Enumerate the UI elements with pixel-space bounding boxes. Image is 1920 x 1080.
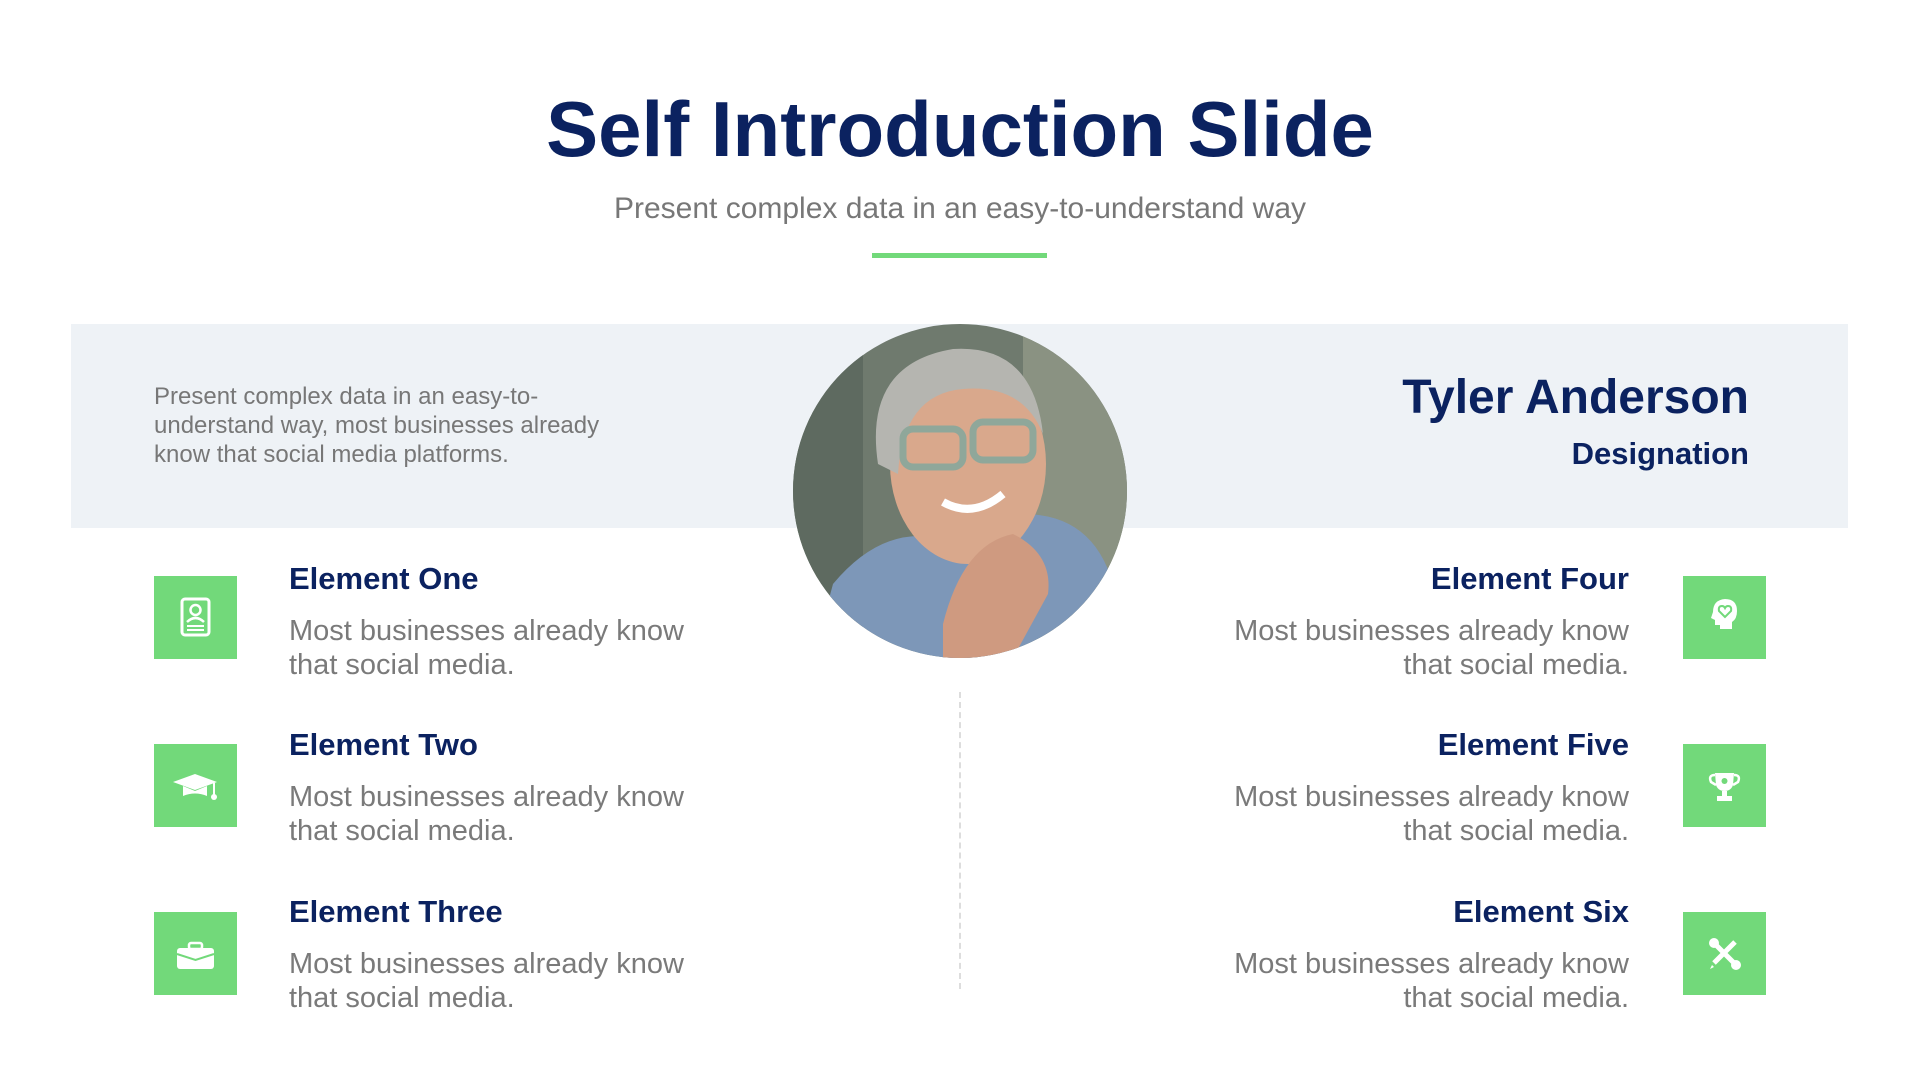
icon: head with heart [1683, 576, 1766, 659]
element two: Element Two [289, 727, 478, 762]
icon: trophy [1683, 744, 1766, 827]
element two: Most businesses already know [289, 781, 684, 813]
icon: graduation cap [154, 744, 237, 827]
element three [154, 894, 684, 1014]
element five [1234, 727, 1766, 847]
element five: Element Five [1438, 727, 1629, 762]
element four [1234, 561, 1766, 681]
name block: Designation [1572, 436, 1749, 471]
header band [71, 324, 1848, 528]
element five: Most businesses already know [1234, 781, 1629, 813]
icon: briefcase [154, 912, 237, 995]
element four: Element Four [1431, 561, 1629, 596]
name block [1402, 371, 1749, 471]
icon: tools [1683, 912, 1766, 995]
element one [154, 561, 684, 681]
element one: that social media. [289, 649, 515, 681]
intro text: Present complex data in an easy-to- [154, 383, 538, 410]
accent line [872, 253, 1047, 258]
element five: that social media. [1403, 815, 1629, 847]
element two [154, 727, 684, 847]
icon: id badge [154, 576, 237, 659]
element four: Most businesses already know [1234, 615, 1629, 647]
intro text: understand way, most businesses already [154, 412, 599, 439]
element three: Most businesses already know [289, 948, 684, 980]
photo [793, 324, 1127, 658]
element three: that social media. [289, 982, 515, 1014]
element one: Most businesses already know [289, 615, 684, 647]
name block: Tyler Anderson [1402, 371, 1749, 424]
element six: that social media. [1403, 982, 1629, 1014]
element four: that social media. [1403, 649, 1629, 681]
element six [1234, 894, 1766, 1014]
dashed divider [959, 692, 961, 989]
intro text [154, 383, 599, 468]
element two: that social media. [289, 815, 515, 847]
element three: Element Three [289, 894, 503, 929]
title: Self Introduction Slide [546, 85, 1374, 173]
intro text: know that social media platforms. [154, 441, 509, 468]
element six: Element Six [1453, 894, 1629, 929]
element one: Element One [289, 561, 478, 596]
element six: Most businesses already know [1234, 948, 1629, 980]
subtitle: Present complex data in an easy-to-understand way [614, 192, 1306, 225]
